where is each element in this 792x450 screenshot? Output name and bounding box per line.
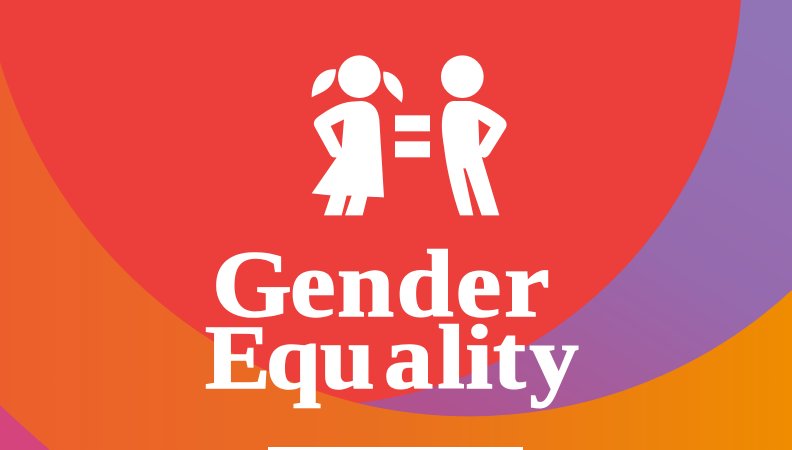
purple arc shape [357,0,792,416]
white bar at bottom [268,447,523,450]
icon: equals sign [395,115,430,157]
title [205,232,579,408]
icon: girl [312,55,403,215]
title line: Gender: Gender [212,232,550,337]
pink corner shape [0,405,50,450]
title line: Equality: Equality [205,308,579,408]
icon: boy [441,55,507,215]
icon: girl and boy with equals sign [312,55,507,215]
